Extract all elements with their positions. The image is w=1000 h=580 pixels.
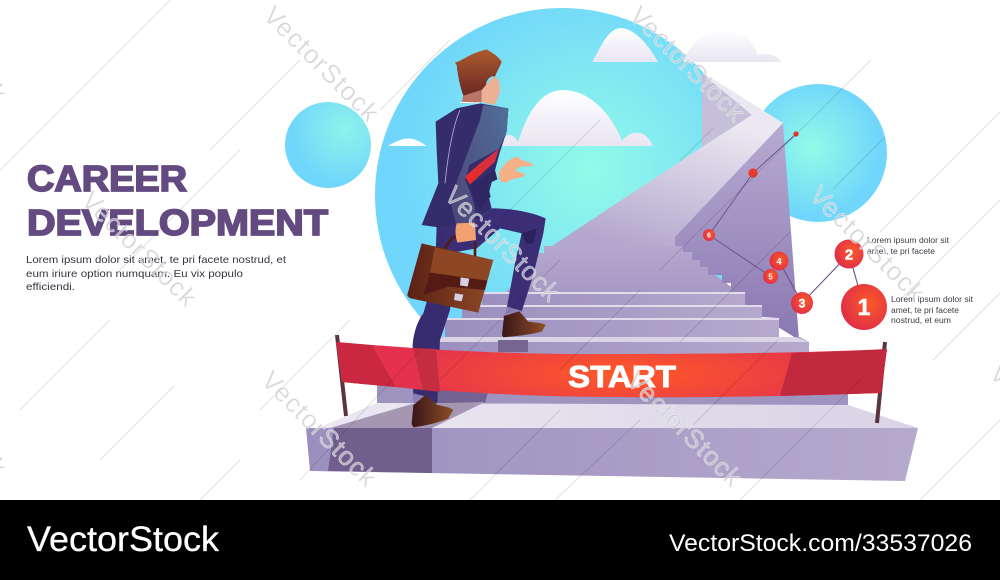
briefcase (407, 243, 493, 313)
bubble 2: 2 (845, 246, 853, 264)
collar (460, 101, 480, 104)
clouds (388, 28, 781, 146)
bubble 2 (834, 240, 864, 268)
hand (498, 157, 533, 183)
milestone path (703, 131, 887, 330)
handle (445, 235, 475, 257)
staircase (306, 72, 918, 481)
watermark: VectorStock (258, 0, 386, 128)
jacket (422, 103, 508, 227)
rear leg (413, 225, 462, 403)
description: eum iriure option numquam. Eu vix populo (26, 268, 243, 280)
footer bar (0, 500, 1000, 580)
watermark: VectorStock (256, 365, 384, 493)
watermark: VectorStock (804, 180, 932, 308)
shadow on platform (330, 402, 485, 428)
front shoe (502, 311, 546, 337)
hair (455, 49, 502, 96)
step treads (427, 292, 809, 360)
sky circle: right (749, 84, 887, 222)
sky circle: left (285, 102, 371, 188)
description: efficiendi. (26, 281, 75, 293)
fist (455, 223, 476, 243)
title: CAREER (27, 158, 187, 199)
callout text 1: nostrud, et eum (891, 316, 951, 325)
callout text 1: Lorem ipsum dolor sit (891, 295, 974, 304)
front sock (505, 307, 522, 315)
bubble 3: 3 (799, 296, 806, 310)
rear sock (413, 393, 427, 403)
right fold (780, 349, 887, 396)
forearm (470, 170, 497, 210)
neck (463, 76, 500, 105)
watermark: VectorStock (439, 180, 567, 308)
front leg (440, 208, 546, 312)
callout text 2: Lorem ipsum dolor sit (867, 236, 950, 245)
platform front (306, 428, 918, 481)
bubble 5 (763, 269, 778, 284)
bubble 1 (841, 284, 887, 330)
sky circle: main (375, 8, 749, 382)
right side wall (675, 123, 799, 340)
rear shoe (412, 395, 453, 427)
start ribbon (336, 335, 887, 423)
connector lines (709, 134, 796, 276)
title (27, 158, 328, 243)
sleeve (452, 105, 508, 224)
lower riser (377, 375, 848, 406)
watermark: VectorStock (76, 185, 204, 313)
bubble 4 (770, 252, 788, 270)
bubble 5: 5 (768, 272, 773, 282)
watermark: VectorStock (624, 0, 752, 128)
bubble 4: 4 (776, 256, 782, 268)
front leg shade (522, 228, 537, 244)
left post (337, 335, 346, 416)
upper landing back wall (702, 73, 752, 147)
dot small (793, 131, 799, 137)
stair mass (500, 246, 745, 300)
callout text 1: amet, te pri facete (891, 306, 960, 315)
watermark: VectorStock (621, 365, 749, 493)
footer url: VectorStock.com/33537026 (669, 530, 972, 557)
back seam (445, 110, 460, 183)
bubble 3 (791, 292, 813, 314)
ribbon band (336, 342, 887, 397)
description (26, 254, 286, 293)
left fold (336, 342, 396, 387)
callout text 2: amet, te pri facete (867, 247, 936, 256)
bubble 1: 1 (858, 294, 871, 320)
platform top (318, 403, 918, 428)
description: Lorem ipsum dolor sit amet, te pri facete nostrud, et (26, 254, 286, 266)
upper stair flight lit face (552, 72, 783, 246)
callout text 2 (867, 236, 950, 256)
title: DEVELOPMENT (27, 202, 328, 243)
footer logo: VectorStock (27, 520, 220, 559)
start label: START (568, 359, 676, 394)
bubble 6 (703, 229, 715, 241)
callout text 1 (891, 295, 974, 325)
tie (465, 148, 499, 184)
bubble 6: 6 (707, 232, 711, 240)
right post (877, 342, 885, 423)
businessman (407, 49, 546, 427)
dot medium (748, 168, 758, 178)
